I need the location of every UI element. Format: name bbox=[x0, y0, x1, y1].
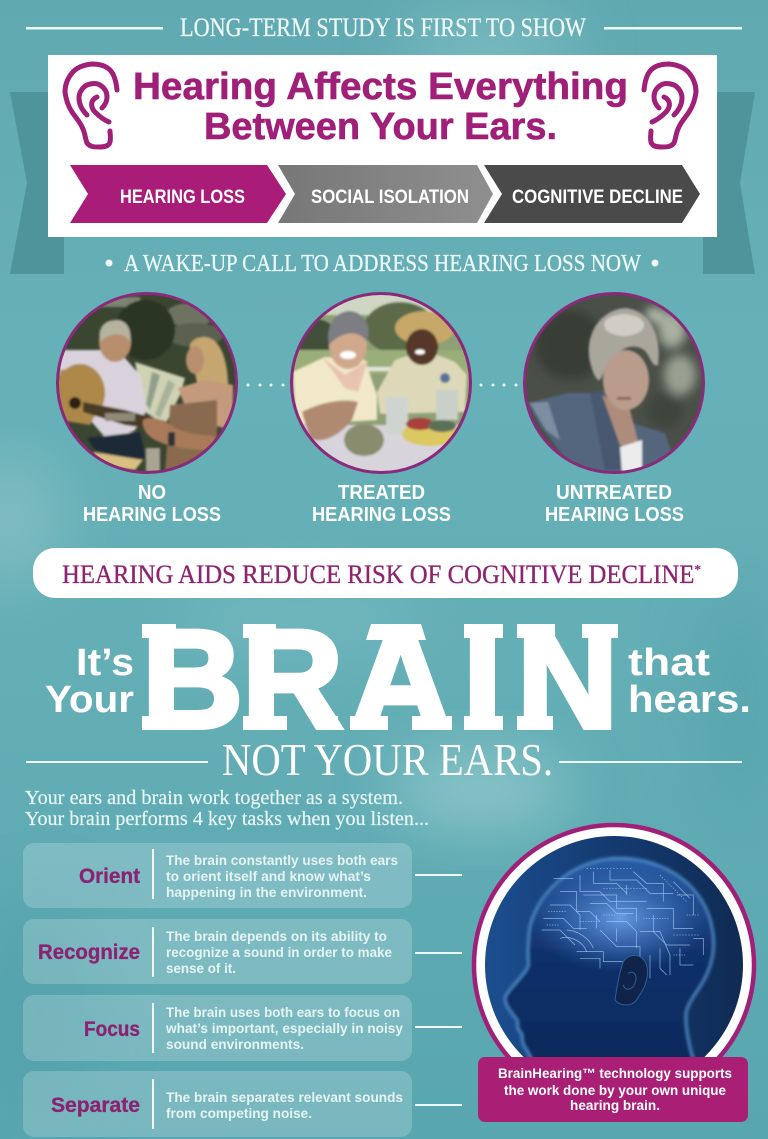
label: treated hearing loss: HEARING LOSS bbox=[312, 504, 451, 526]
wake-up subheading: A WAKE-UP CALL TO ADDRESS HEARING LOSS NOW bbox=[124, 250, 642, 277]
panel: separate: Separate bbox=[51, 1094, 140, 1117]
panel: separate: from competing noise. bbox=[166, 1106, 312, 1121]
illustration: brain circle bbox=[472, 822, 756, 1057]
panel: focus: what’s important, especially in noisy bbox=[165, 1021, 403, 1036]
panel: recognize: sense of it. bbox=[166, 961, 236, 976]
photo: no hearing loss bbox=[55, 293, 237, 473]
icon: left ear bbox=[65, 64, 117, 147]
label: no hearing loss: NO bbox=[138, 482, 166, 504]
banner: hearing aids reduce risk bbox=[33, 548, 738, 598]
ribbon right bbox=[703, 92, 755, 274]
ribbon left bbox=[10, 92, 64, 274]
label: treated hearing loss: TREATED bbox=[338, 482, 425, 504]
arrow: social isolation bbox=[278, 165, 493, 223]
arrow: hearing loss bbox=[70, 165, 286, 223]
panel: separate bbox=[23, 1071, 462, 1137]
arrow: cognitive decline bbox=[484, 165, 700, 223]
panel: recognize: The brain depends on its ability to bbox=[166, 929, 387, 944]
panel: title card bbox=[48, 55, 717, 237]
intro text bbox=[25, 787, 429, 830]
headline: it's your brain that hears: Your bbox=[45, 679, 134, 721]
intro text: Your ears and brain work together as a system. bbox=[25, 787, 403, 809]
panel: focus: Focus bbox=[84, 1018, 140, 1041]
panel: recognize bbox=[23, 919, 462, 984]
label: untreated hearing loss bbox=[545, 482, 684, 526]
photo: treated hearing loss bbox=[291, 293, 471, 475]
label: untreated hearing loss: HEARING LOSS bbox=[545, 504, 684, 526]
callout: brainhearing: the work done by your own unique bbox=[504, 1083, 726, 1098]
callout: brainhearing: hearing brain. bbox=[570, 1098, 660, 1113]
subheadline: not your ears: NOT YOUR EARS. bbox=[222, 734, 553, 785]
label: treated hearing loss bbox=[312, 482, 451, 526]
callout: brainhearing: BrainHearing™ technology supports bbox=[498, 1066, 732, 1081]
label: untreated hearing loss: UNTREATED bbox=[556, 482, 672, 504]
panel: separate: The brain separates relevant sounds bbox=[166, 1090, 403, 1105]
label: no hearing loss: HEARING LOSS bbox=[83, 504, 221, 526]
top heading: LONG-TERM STUDY IS FIRST TO SHOW bbox=[180, 13, 586, 42]
connector dots 1 bbox=[246, 384, 284, 386]
headline: it's your brain that hears: that bbox=[628, 642, 710, 684]
circuit brain bbox=[542, 868, 703, 978]
banner: hearing aids reduce risk: * bbox=[694, 563, 701, 578]
panel: orient: The brain constantly uses both ears bbox=[166, 853, 398, 868]
connector dots 2 bbox=[480, 384, 518, 386]
title text: Between Your Ears. bbox=[204, 106, 557, 148]
icon: right ear bbox=[644, 64, 696, 147]
headline: it's your brain that hears: It’s bbox=[76, 642, 134, 684]
ear bbox=[615, 955, 647, 1005]
arrow: hearing loss: HEARING LOSS bbox=[120, 187, 245, 208]
panel: recognize: Recognize bbox=[38, 941, 140, 964]
arrow: cognitive decline: COGNITIVE DECLINE bbox=[512, 187, 683, 208]
title text bbox=[133, 66, 628, 148]
photo: untreated hearing loss bbox=[524, 293, 704, 475]
panel: orient: Orient bbox=[79, 865, 140, 888]
panel: focus: sound environments. bbox=[166, 1037, 304, 1052]
label: no hearing loss bbox=[83, 482, 221, 526]
callout: brainhearing bbox=[478, 1057, 748, 1122]
panel: orient: happening in the environment. bbox=[166, 885, 367, 900]
banner: hearing aids reduce risk: HEARING AIDS REDUCE RISK OF COGNITIVE DECLINE bbox=[62, 560, 726, 589]
panel: recognize: recognize a sound in order to make bbox=[166, 945, 392, 960]
title text: Hearing Affects Everything bbox=[133, 66, 628, 108]
intro text: Your brain performs 4 key tasks when you listen... bbox=[25, 808, 429, 830]
panel: orient: to orient itself and know what’s bbox=[166, 869, 371, 884]
headline: it's your brain that hears: hears. bbox=[628, 679, 751, 721]
panel: focus bbox=[23, 995, 462, 1061]
panel: orient bbox=[23, 843, 462, 908]
headline: it's your brain that hears: BRAIN bbox=[142, 600, 618, 758]
panel: focus: The brain uses both ears to focus on bbox=[166, 1005, 400, 1020]
headline: it's your brain that hears bbox=[45, 600, 751, 758]
head silhouette bbox=[505, 858, 714, 1075]
arrow: social isolation: SOCIAL ISOLATION bbox=[311, 187, 469, 208]
